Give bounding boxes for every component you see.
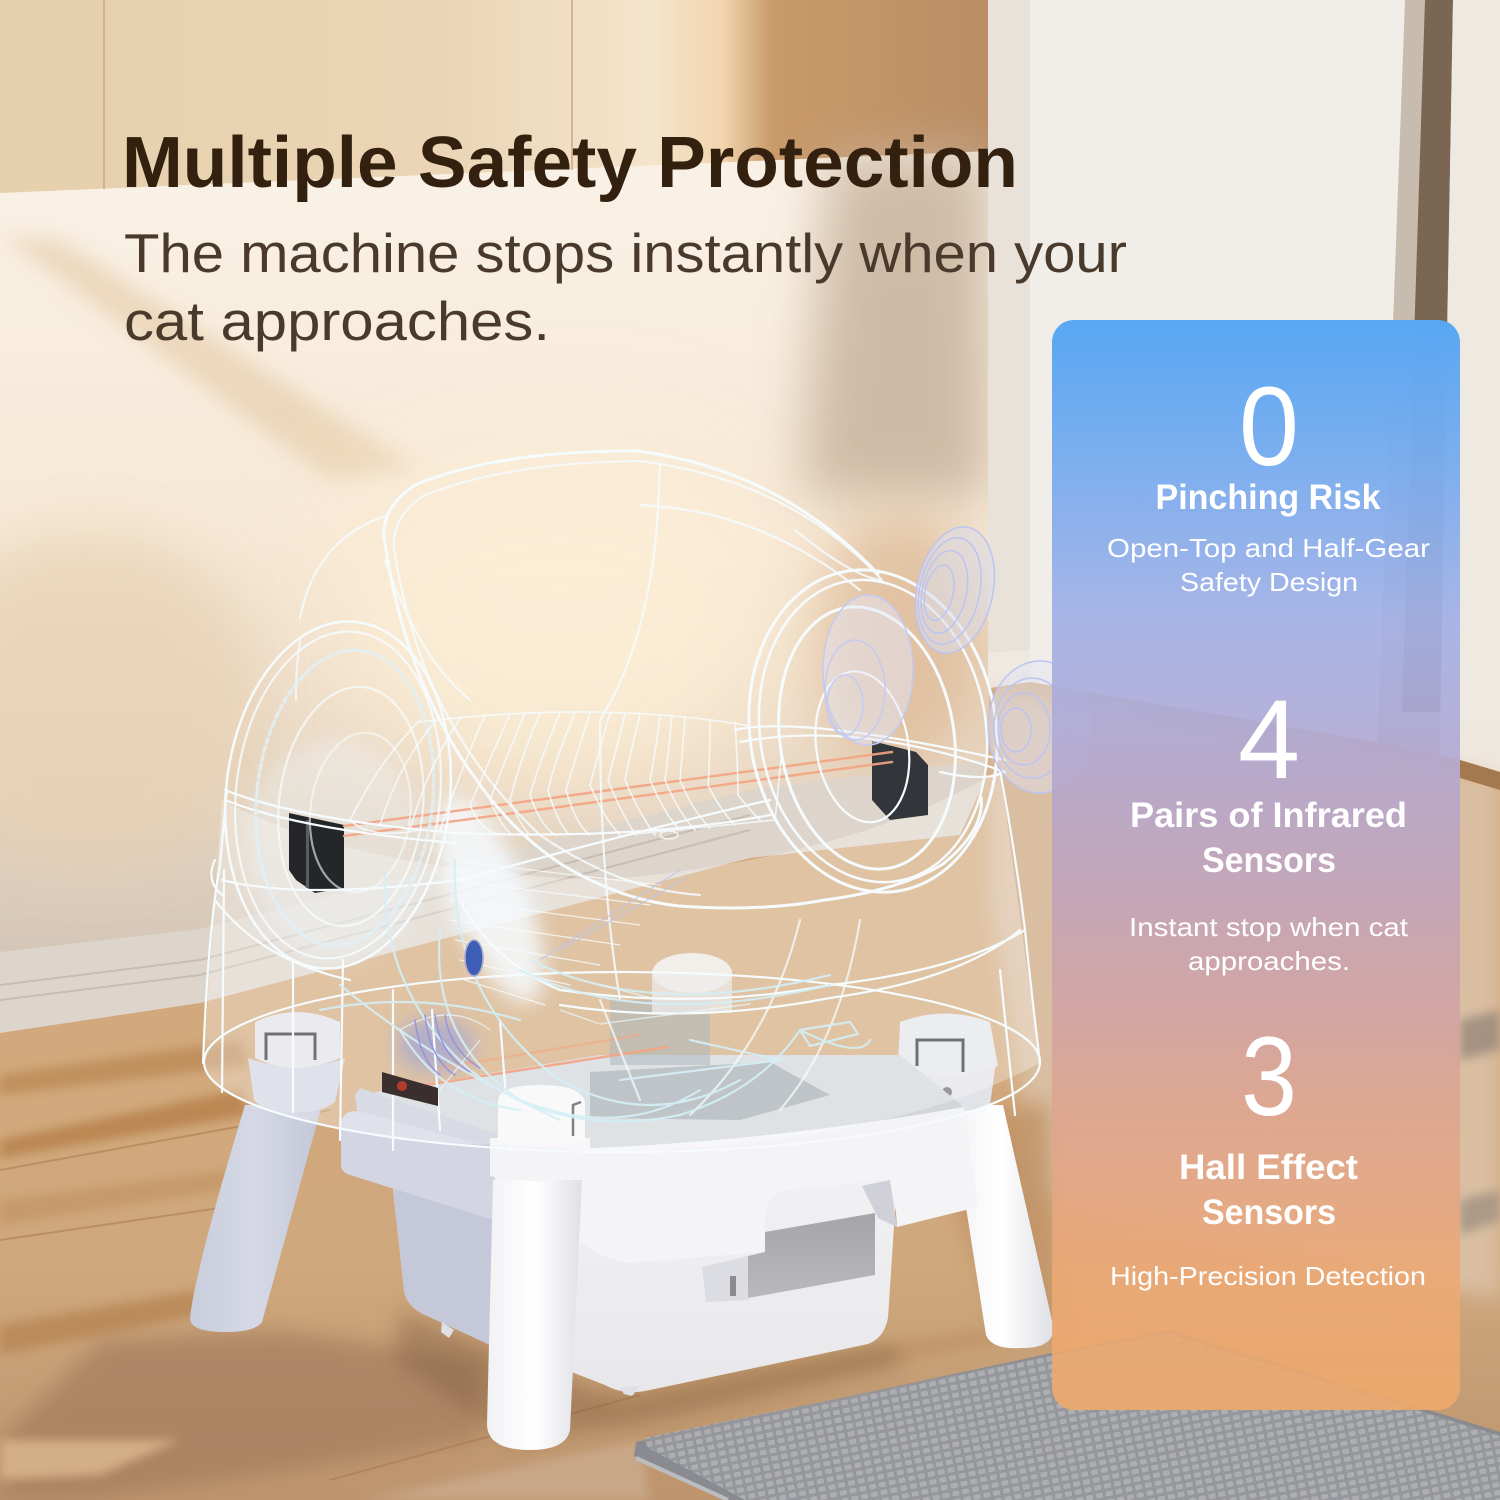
baseboard xyxy=(0,760,985,1033)
outer shell xyxy=(203,770,1040,1150)
inner bowl curves xyxy=(320,860,870,1122)
shadow under product xyxy=(395,1310,905,1440)
blue motor ring xyxy=(465,940,483,976)
back right leg xyxy=(898,1014,1053,1348)
panel: safety stats xyxy=(1052,320,1460,1410)
waist band xyxy=(211,726,1005,895)
title: Multiple Safety Protection xyxy=(122,123,1018,203)
stat: 3 hall effect sensors xyxy=(1110,1014,1426,1291)
translucent shell fill xyxy=(203,770,1040,1152)
subtitle: The machine stops instantly when your xyxy=(124,222,1127,284)
door frame and right wall xyxy=(988,0,1500,760)
sound waves upper xyxy=(905,519,1005,661)
stat: 0 pinching risk: Open-Top and Half-Gear xyxy=(1107,533,1430,563)
light fan of wires xyxy=(445,860,686,1005)
stat: 4 infrared sensors xyxy=(1129,677,1409,976)
stat: 3 hall effect sensors: Sensors xyxy=(1202,1193,1336,1232)
stat: 0 pinching risk: Pinching Risk xyxy=(1156,478,1381,517)
cat mat xyxy=(634,1330,1500,1500)
waste drawer xyxy=(392,1180,897,1396)
black infrared sensor right xyxy=(872,741,928,820)
wood wall panels xyxy=(0,0,990,193)
glow xyxy=(245,740,566,1071)
sound waves right xyxy=(988,661,1092,793)
floor planks and light xyxy=(0,690,1500,1500)
skirt curves xyxy=(215,900,1025,1014)
stat: 4 infrared sensors: Sensors xyxy=(1202,841,1336,880)
litter robot hardware xyxy=(190,953,1053,1450)
x-ray wireframe of globe xyxy=(203,451,1092,1152)
sunlight and shadow on wall xyxy=(0,150,990,870)
stat: 4 infrared sensors: approaches. xyxy=(1188,946,1350,976)
front leg xyxy=(487,1085,590,1450)
stat: 0 pinching risk: 0 xyxy=(1239,364,1299,489)
subtitle xyxy=(124,222,1127,352)
litter bowl ribs xyxy=(350,712,782,839)
left gear wheel xyxy=(208,610,468,980)
stat: 3 hall effect sensors: Hall Effect xyxy=(1179,1148,1358,1187)
small sensor xyxy=(382,1072,438,1106)
stat: 4 infrared sensors: Instant stop when cat xyxy=(1129,912,1409,942)
back left leg xyxy=(190,1012,345,1332)
infrared beams xyxy=(344,752,892,1085)
stat: 3 hall effect sensors: 3 xyxy=(1241,1014,1297,1139)
handle xyxy=(702,1180,897,1302)
tray rim front xyxy=(495,1107,978,1263)
wall xyxy=(0,150,990,1040)
stat: 3 hall effect sensors: High-Precision Detection xyxy=(1110,1261,1426,1291)
right wheel xyxy=(726,552,1020,910)
purple cable bundle xyxy=(415,1015,480,1075)
floor xyxy=(0,682,1500,1500)
stat: 0 pinching risk xyxy=(1107,364,1430,597)
base ring xyxy=(204,972,1040,1152)
subtitle: cat approaches. xyxy=(124,290,550,352)
stat: 4 infrared sensors: 4 xyxy=(1238,677,1300,802)
transparent base cavity xyxy=(355,953,964,1170)
sound waves inner xyxy=(823,595,913,745)
tray rim left xyxy=(341,1111,500,1222)
main shell arc xyxy=(384,451,981,908)
stat: 4 infrared sensors: Pairs of Infrared xyxy=(1130,796,1407,835)
black infrared sensor left xyxy=(289,813,344,893)
stat: 0 pinching risk: Safety Design xyxy=(1180,567,1358,597)
